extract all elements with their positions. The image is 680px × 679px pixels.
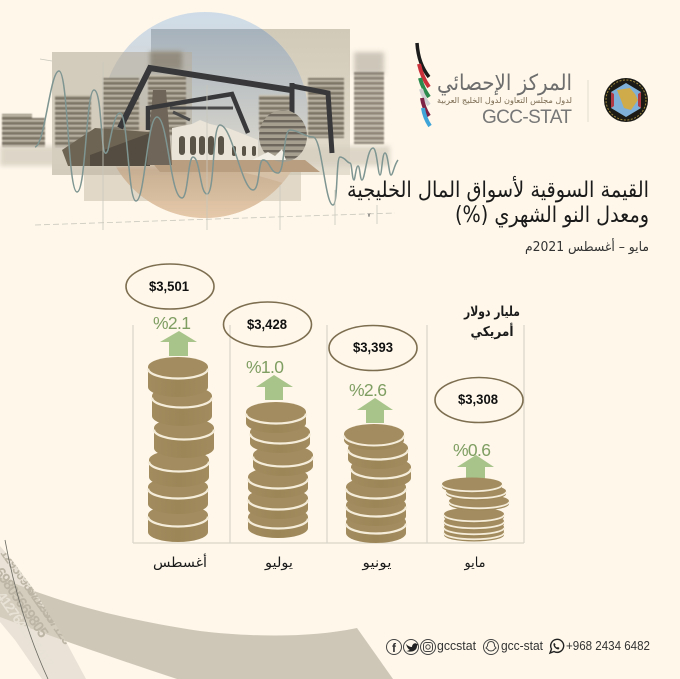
unit label: مليار دولار (463, 304, 520, 320)
title (347, 176, 649, 228)
arrow June (357, 398, 393, 423)
percent June: %2.6 (349, 380, 387, 400)
coin stack July (246, 402, 313, 538)
percent July: %1.0 (246, 357, 284, 377)
faint axis lines (35, 59, 395, 230)
title: القيمة السوقية لأسواق المال الخليجية (347, 176, 649, 203)
icon: twitter (404, 640, 418, 654)
value oval August (126, 264, 214, 309)
handle: gccstat: gccstat (437, 639, 477, 653)
unit label: أمريكي (470, 323, 514, 340)
value May: $3,308 (458, 391, 498, 407)
decorative bottom band: 6712367123 (24, 583, 75, 647)
logo divider (587, 80, 589, 122)
circle backdrop (102, 12, 308, 218)
icon: snapchat (484, 640, 498, 654)
logo: GCC-STAT: GCC-STAT (482, 107, 572, 128)
column: July (224, 302, 313, 571)
decorative bottom band: 9656596565965 (12, 559, 74, 640)
wave line (35, 71, 398, 205)
subtitle: مايو – أغسطس 2021م (525, 238, 649, 255)
white palace (172, 120, 258, 160)
photo tile right (151, 29, 350, 175)
month August: أغسطس (153, 553, 207, 571)
value oval July (224, 302, 312, 347)
month June: يونيو (361, 555, 392, 571)
unit label (463, 304, 520, 340)
month May: مايو (464, 555, 486, 571)
arrow August (160, 331, 197, 356)
column: May (435, 378, 523, 571)
value July: $3,428 (247, 316, 287, 332)
value August: $3,501 (149, 278, 189, 294)
icon: facebook (386, 640, 402, 655)
value oval May (435, 378, 523, 422)
small axis label: ٧ (367, 213, 371, 219)
percent August: %2.1 (153, 313, 191, 333)
icon: instagram (420, 640, 436, 654)
value June: $3,393 (353, 339, 393, 355)
photo tiles (0, 29, 390, 218)
title: ومعدل النو الشهري (%) (455, 203, 649, 228)
icon: facebook: f (392, 641, 397, 655)
decorative bottom band (0, 540, 393, 679)
coin stack August (148, 357, 214, 542)
round striped building (259, 110, 307, 162)
coin stack June (344, 424, 411, 543)
icon: GCC emblem (604, 78, 648, 122)
value oval June (329, 326, 417, 370)
coin stack May (442, 478, 509, 542)
column: June (329, 326, 417, 571)
icon: whatsapp (550, 639, 564, 653)
white tent (252, 149, 286, 160)
logo: arabic name: المركز الإحصائي (437, 71, 572, 96)
phone number: +968 2434 6482 (566, 639, 650, 653)
arrow July (256, 375, 293, 400)
logo: arabic subtitle: لدول مجلس التعاون لدول الخليج العربية (437, 96, 572, 105)
handle: gcc-stat: gcc-stat (501, 639, 544, 653)
chart grid (133, 325, 524, 543)
column: August (126, 264, 214, 571)
monument (147, 90, 172, 165)
ground (150, 160, 320, 172)
footer social bar (386, 639, 650, 655)
rock (62, 128, 150, 166)
logo: colour ribbon (417, 43, 430, 126)
arrow May (457, 455, 494, 480)
black steel frames (120, 68, 332, 153)
percent May: %0.6 (453, 440, 491, 460)
coin towers (2, 51, 384, 147)
month July: يوليو (264, 555, 293, 571)
hero illustration (0, 12, 398, 230)
